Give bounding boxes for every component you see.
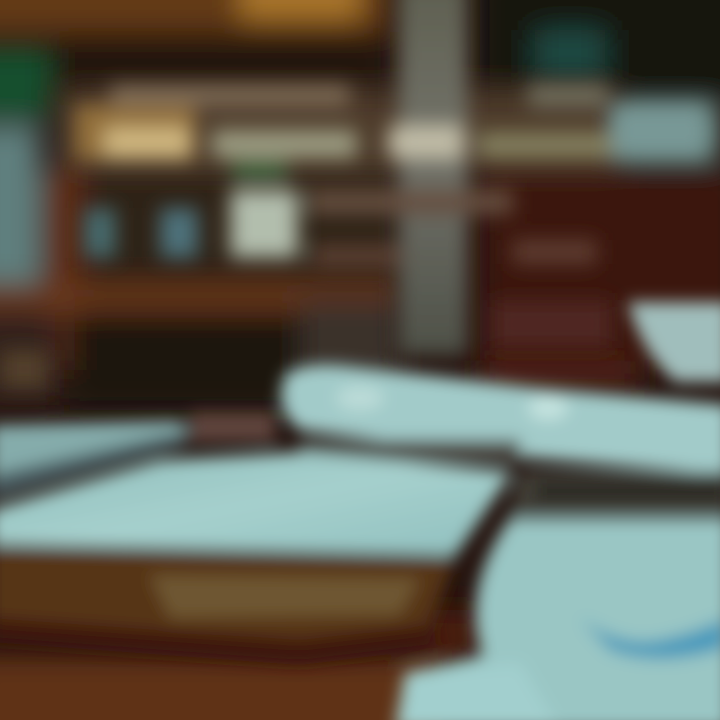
dark gap, right — [510, 472, 720, 515]
foreground: table and books — [0, 302, 720, 720]
shelf items — [0, 0, 708, 388]
lower right sheet — [400, 518, 720, 720]
blue mark — [580, 618, 720, 659]
bowl at right — [628, 302, 720, 382]
central open book — [0, 452, 512, 556]
rolled paper, upper — [281, 364, 720, 475]
book block — [0, 548, 455, 650]
left sheet — [0, 420, 190, 480]
